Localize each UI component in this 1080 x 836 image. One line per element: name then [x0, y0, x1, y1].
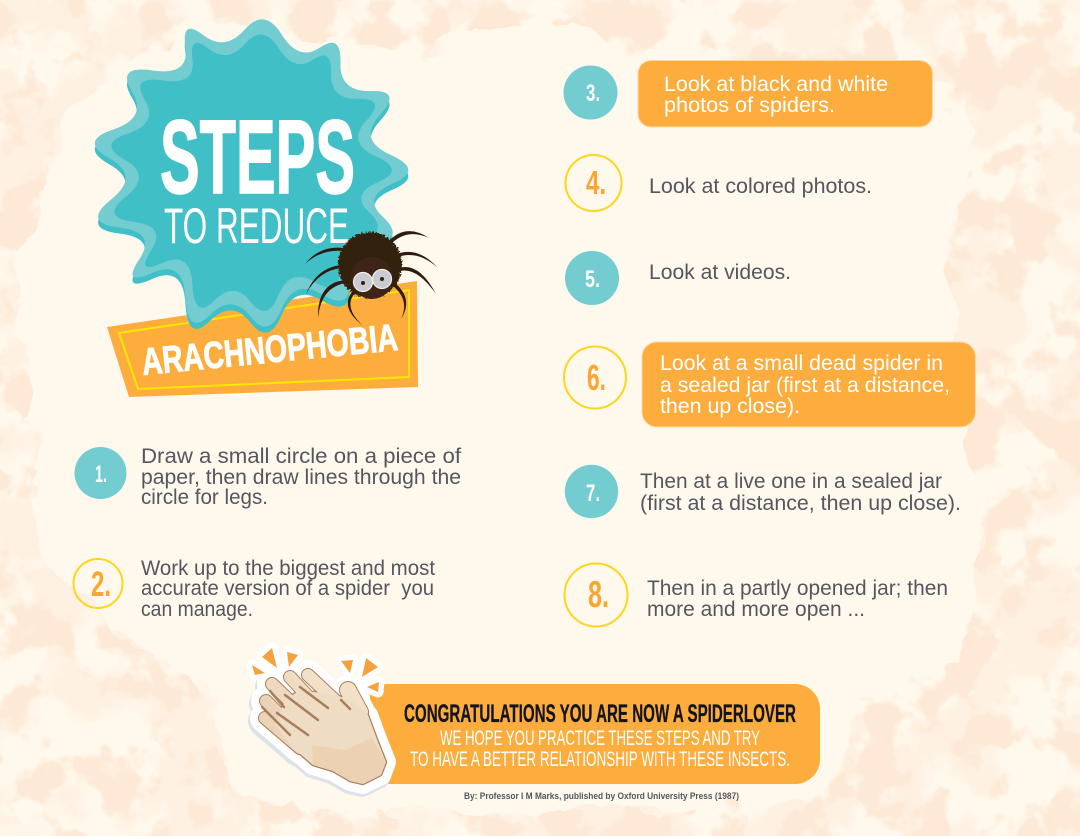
badge 6	[564, 346, 626, 408]
badge 3	[564, 66, 618, 120]
text 2: can manage.	[141, 597, 253, 621]
heading: steps: STEPS	[160, 99, 355, 216]
step 3	[564, 60, 932, 127]
step 5	[565, 251, 791, 305]
credit: By: Professor I M Marks, published by Oxford University Press (1987)	[464, 791, 739, 801]
step 1	[74, 444, 461, 509]
text 3: photos of spiders.	[664, 93, 835, 117]
text 3	[664, 72, 888, 117]
heading: to reduce: TO REDUCE	[164, 198, 349, 254]
text 8: more and more open ...	[647, 597, 865, 621]
text 1: paper, then draw lines through the	[141, 465, 461, 489]
badge 5: 5.	[585, 266, 600, 293]
badge 1: 1.	[95, 461, 107, 488]
step 7	[565, 465, 961, 518]
text 7: Then at a live one in a sealed jar	[640, 469, 942, 493]
title badge	[95, 19, 438, 397]
badge 4	[566, 155, 622, 211]
text 6: a sealed jar (first at a distance,	[660, 373, 950, 397]
text 8	[647, 576, 948, 621]
text 6: then up close).	[660, 394, 800, 418]
text 2: accurate version of a spider you	[141, 576, 434, 600]
text 2: Work up to the biggest and most	[141, 556, 435, 580]
text 6: Look at a small dead spider in	[660, 351, 943, 375]
ribbon: arachnophobia: ARACHNOPHOBIA	[140, 317, 400, 384]
text 5: Look at videos.	[649, 260, 791, 284]
starburst	[95, 19, 408, 333]
badge 8: 8.	[588, 574, 609, 615]
badge 3: 3.	[586, 80, 600, 107]
step 2	[74, 556, 435, 621]
badge 2: 2.	[91, 565, 111, 604]
text 3: Look at black and white	[664, 72, 888, 96]
text 4: Look at colored photos.	[649, 174, 872, 198]
text 1: Draw a small circle on a piece of	[141, 444, 461, 468]
callout 3	[638, 60, 932, 127]
ribbon: arachnophobia	[107, 281, 418, 397]
icon: clapping hands	[252, 648, 386, 787]
badge 5	[565, 251, 619, 305]
badge 6: 6.	[587, 357, 606, 398]
text 2	[141, 556, 435, 621]
text 1	[141, 444, 461, 509]
badge 1	[74, 447, 126, 499]
banner text: WE HOPE YOU PRACTICE THESE STEPS AND TRY	[440, 727, 760, 750]
text 8: Then in a partly opened jar; then	[647, 576, 948, 600]
badge 7: 7.	[586, 480, 600, 507]
badge 8	[564, 564, 628, 626]
callout 6	[642, 342, 976, 427]
congratulations banner	[370, 684, 820, 784]
badge 4: 4.	[586, 164, 606, 201]
banner heading: CONGRATULATIONS YOU ARE NOW A SPIDERLOVER	[404, 700, 796, 728]
badge 2	[74, 559, 122, 608]
text 7: (first at a distance, then up close).	[640, 491, 961, 515]
badge 7	[565, 465, 618, 518]
banner text	[410, 727, 790, 771]
step 4	[566, 155, 872, 211]
text 1: circle for legs.	[141, 485, 268, 509]
banner text: TO HAVE A BETTER RELATIONSHIP WITH THESE INSECTS.	[410, 748, 790, 771]
text 7	[640, 469, 961, 515]
icon: spider	[305, 231, 438, 326]
banner background	[370, 684, 820, 784]
text 6	[660, 351, 950, 418]
step 8	[564, 564, 948, 626]
step 6	[564, 342, 976, 427]
